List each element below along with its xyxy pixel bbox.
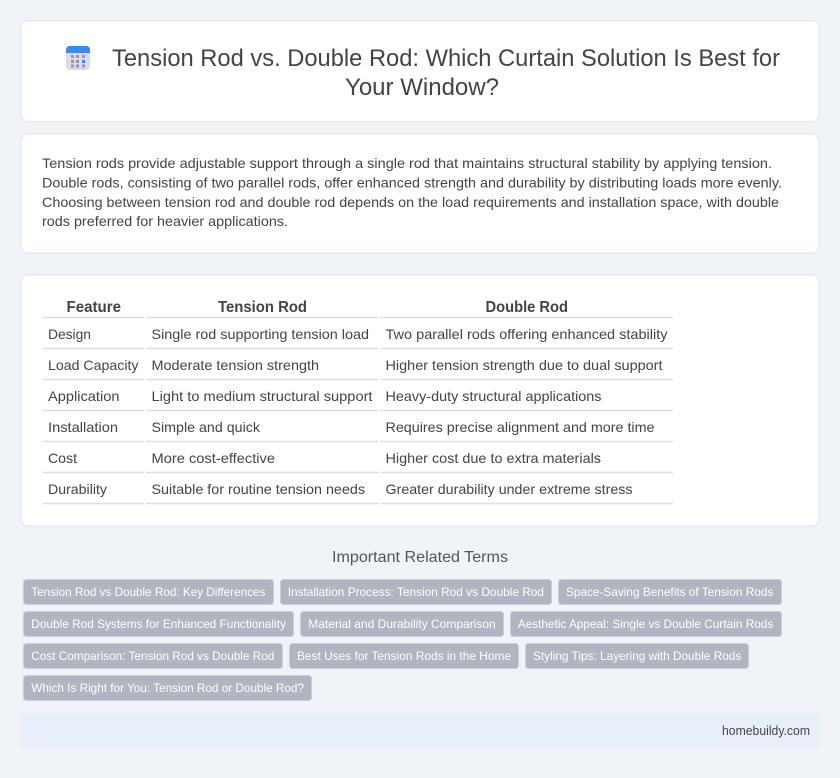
tag: material and durability: Material and Durability Comparison — [308, 617, 496, 631]
table row: installation — [43, 419, 673, 442]
table row: cost: Cost — [48, 450, 77, 466]
heading: related terms: Important Related Terms — [332, 549, 508, 566]
tag: material and durability — [300, 612, 504, 636]
table row: cost: More cost-effective — [152, 450, 275, 466]
table row: load capacity: Moderate tension strength — [152, 357, 319, 373]
footer — [20, 714, 820, 748]
table row: application: Heavy-duty structural applications — [386, 388, 602, 404]
text block: introduction: rods preferred for heavier applications. — [42, 213, 288, 229]
tag: space-saving benefits — [558, 580, 782, 604]
table row: durability: Suitable for routine tension needs — [152, 481, 365, 497]
table row: design: Two parallel rods offering enhanced stability — [386, 326, 668, 342]
tag: aesthetic appeal — [510, 612, 782, 636]
table row: design: Design — [48, 326, 91, 342]
tag: best uses — [290, 644, 518, 668]
tag: installation process: Installation Process: Tension Rod vs Double Rod — [288, 585, 544, 599]
related terms tags — [24, 580, 782, 700]
table row: durability — [43, 481, 673, 504]
title: Tension Rod vs. Double Rod: Which Curtain Solution Is Best for — [112, 45, 780, 72]
text block: introduction — [42, 155, 782, 229]
tag: double rod systems: Double Rod Systems for Enhanced Functionality — [31, 617, 286, 631]
table header row: Feature — [66, 299, 121, 316]
tag: cost comparison — [24, 644, 282, 668]
table row: installation: Requires precise alignment and more time — [386, 419, 655, 435]
table row: installation: Installation — [48, 419, 118, 435]
tag: best uses: Best Uses for Tension Rods in the Home — [297, 649, 511, 663]
table header row: Double Rod — [486, 299, 568, 316]
tag: double rod systems — [24, 612, 294, 636]
table row: application: Application — [48, 388, 120, 404]
panel: introduction — [21, 134, 819, 253]
footer: homebuildy.com — [722, 724, 810, 738]
tag: which is right: Which Is Right for You: Tension Rod or Double Rod? — [31, 681, 304, 695]
tag: aesthetic appeal: Aesthetic Appeal: Single vs Double Curtain Rods — [518, 617, 773, 631]
table row: durability: Durability — [48, 481, 107, 497]
tag: space-saving benefits: Space-Saving Benefits of Tension Rods — [566, 585, 773, 599]
table row: durability: Greater durability under extreme stress — [386, 481, 632, 497]
title: Your Window? — [345, 74, 499, 101]
tag: styling tips — [526, 644, 748, 668]
icon: calendar — [66, 46, 90, 70]
text block: introduction: Tension rods provide adjustable support through a single rod that maintains structural stability by applying tension. — [42, 155, 772, 171]
tag: styling tips: Styling Tips: Layering with Double Rods — [533, 649, 741, 663]
tag: installation process — [280, 580, 552, 604]
tag: cost comparison: Cost Comparison: Tension Rod vs Double Rod — [31, 649, 274, 663]
table row: load capacity — [43, 357, 673, 380]
table header row: Tension Rod — [218, 299, 307, 316]
tag: key differences: Tension Rod vs Double Rod: Key Differences — [31, 585, 265, 599]
table header row — [43, 299, 673, 318]
panel: header — [21, 21, 819, 122]
table row: cost: Higher cost due to extra materials — [386, 450, 601, 466]
panel: comparison table — [21, 275, 819, 526]
table row: design — [43, 326, 673, 348]
table row: design: Single rod supporting tension load — [152, 326, 369, 342]
text block: introduction: Choosing between tension rod and double rod depends on the load requirements and installation space, with double — [42, 194, 779, 210]
table row: installation: Simple and quick — [152, 419, 261, 435]
tag: key differences — [24, 580, 274, 604]
table row: application — [43, 388, 673, 410]
tag: which is right — [24, 676, 312, 700]
text block: introduction: Double rods, consisting of two parallel rods, offer enhanced strength and durability by distributing loads more evenly. — [42, 174, 782, 190]
table row: cost — [43, 450, 673, 472]
title — [112, 45, 780, 101]
table row: application: Light to medium structural support — [152, 388, 373, 404]
table row: load capacity: Higher tension strength due to dual support — [386, 357, 663, 373]
table row: load capacity: Load Capacity — [48, 357, 138, 373]
